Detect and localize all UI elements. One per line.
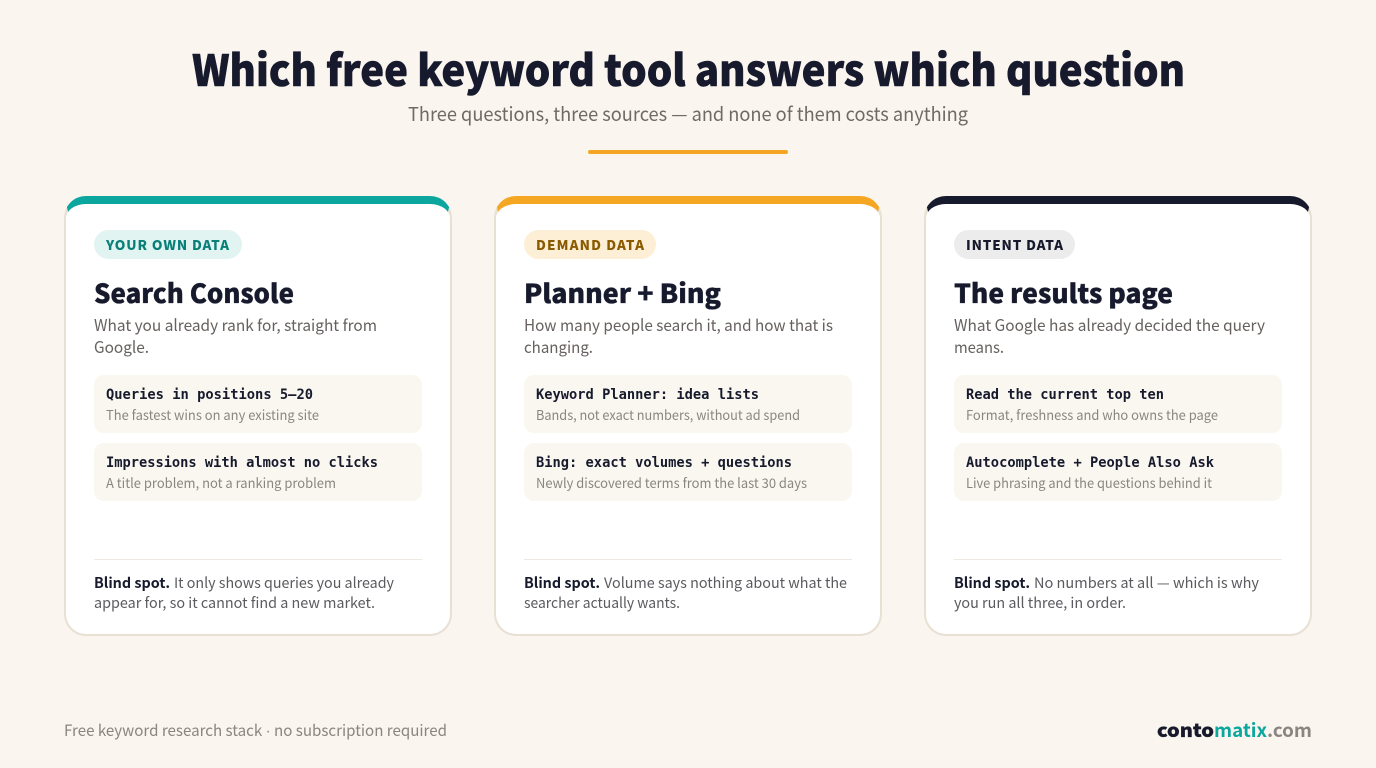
- subtitle: Three questions, three sources — and none of them costs anything: [408, 100, 968, 127]
- brand wordmark: [1157, 717, 1312, 743]
- badge: intent data: [954, 230, 1075, 259]
- badge: demand data: DEMAND DATA: [536, 234, 645, 254]
- panel: Search Console: [64, 196, 452, 636]
- badge: your own data: YOUR OWN DATA: [105, 234, 230, 254]
- card heading: The results page: [954, 274, 1173, 311]
- card heading: Search Console: [94, 274, 294, 311]
- accent rule: [588, 150, 788, 154]
- blind spot note: you run all three, in order.: [954, 592, 1126, 613]
- item: impressions: A title problem, not a ranking problem: [106, 472, 336, 492]
- item: bing: Newly discovered terms from the last 30 days: [536, 472, 807, 492]
- item: bing: [524, 443, 852, 501]
- card description: [524, 312, 833, 358]
- item: top ten: [954, 375, 1282, 433]
- card description: [94, 312, 377, 358]
- item: bing: Bing: exact volumes + questions: [536, 455, 792, 471]
- item: impressions: Impressions with almost no clicks: [106, 455, 378, 471]
- brand wordmark: conto: [1157, 717, 1214, 743]
- item: queries in positions: The fastest wins on any existing site: [106, 404, 319, 424]
- item: keyword planner: [524, 375, 852, 433]
- item: top ten: Read the current top ten: [966, 387, 1164, 403]
- badge: demand data: [524, 230, 656, 259]
- item: autocomplete: [954, 443, 1282, 501]
- blind spot note: Blind spot.: [954, 572, 1030, 593]
- badge: intent data: INTENT DATA: [966, 234, 1064, 254]
- blind spot note: It only shows queries you already: [174, 572, 394, 593]
- item: queries in positions: Queries in positions 5–20: [106, 387, 313, 403]
- footer: [64, 717, 1312, 743]
- card description: Google.: [94, 334, 149, 358]
- blind spot note: No numbers at all — which is why: [1034, 572, 1259, 593]
- blind spot note: Volume says nothing about what the: [604, 572, 847, 593]
- blind spot note: [524, 572, 847, 613]
- item: keyword planner: Keyword Planner: idea lists: [536, 387, 759, 403]
- header: [192, 37, 1185, 154]
- card description: [954, 312, 1266, 358]
- blind spot note: appear for, so it cannot find a new market.: [94, 592, 375, 613]
- item: queries in positions: [94, 375, 422, 433]
- blind spot note: Blind spot.: [94, 572, 170, 593]
- item: autocomplete: Autocomplete + People Also Ask: [966, 455, 1215, 471]
- title: Which free keyword tool answers which question: [192, 37, 1185, 99]
- card description: What you already rank for, straight from: [94, 312, 377, 336]
- card description: How many people search it, and how that is: [524, 312, 833, 336]
- badge: your own data: [94, 230, 242, 259]
- blind spot note: [954, 572, 1259, 613]
- item: impressions: [94, 443, 422, 501]
- footer note: Free keyword research stack · no subscription required: [64, 719, 447, 741]
- panel: Planner + Bing: [494, 196, 882, 636]
- item: autocomplete: Live phrasing and the questions behind it: [966, 472, 1212, 492]
- brand wordmark: .com: [1267, 717, 1312, 743]
- card description: means.: [954, 334, 1004, 358]
- item: top ten: Format, freshness and who owns the page: [966, 404, 1218, 424]
- card description: changing.: [524, 334, 593, 358]
- panel: The results page: [924, 196, 1312, 636]
- item: keyword planner: Bands, not exact numbers, without ad spend: [536, 404, 800, 424]
- card description: What Google has already decided the query: [954, 312, 1266, 336]
- brand wordmark: matix: [1214, 717, 1268, 743]
- blind spot note: searcher actually wants.: [524, 592, 680, 613]
- card heading: Planner + Bing: [524, 274, 721, 311]
- blind spot note: Blind spot.: [524, 572, 600, 593]
- blind spot note: [94, 572, 394, 613]
